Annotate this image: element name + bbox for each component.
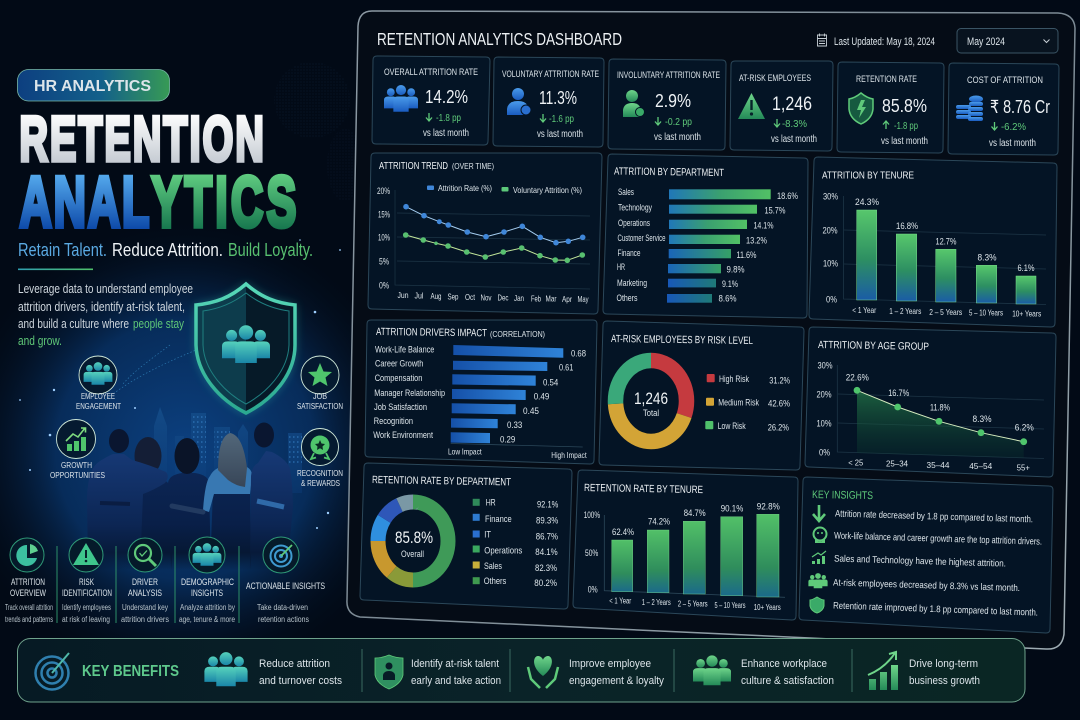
panel: retention rate by tenure: RETENTION RATE BY TENURE — [584, 482, 703, 496]
risk legend: Medium Risk — [718, 398, 759, 408]
feature: demographic insights — [179, 537, 235, 624]
KPI: involuntary attrition rate: -0.2 pp — [665, 117, 692, 128]
retention tenure values: 74.2% — [648, 517, 670, 528]
driver axis captions — [448, 446, 587, 460]
benefit: long-term growth — [868, 652, 980, 690]
trend y axis labels: 10% — [378, 232, 390, 242]
retention legend: 82.3% — [535, 563, 557, 574]
insight: attrition decreased: Attrition rate decreased by 1.8 pp compared to last month. — [835, 509, 1033, 525]
feature: actionable insights — [246, 537, 325, 624]
feature: risk identification: RISK — [79, 577, 94, 587]
retention tenure y labels — [584, 510, 600, 594]
feature: risk identification: IDENTIFICATION — [62, 588, 112, 598]
feature: attrition overview: trends and patterns — [5, 615, 53, 624]
driver names — [373, 344, 445, 440]
tenure values: 8.3% — [978, 252, 997, 264]
panel: retention rate by department: RETENTION RATE BY DEPARTMENT — [372, 474, 512, 488]
trend y axis labels: 5% — [379, 256, 389, 266]
tenure y axis labels: 10% — [823, 258, 838, 270]
tenure category labels: 10+ Years — [1012, 309, 1041, 319]
KPI: at-risk employees: -8.3% — [782, 119, 807, 130]
tenure values: 24.3% — [855, 197, 879, 208]
risk legend: High Risk — [719, 374, 749, 385]
tagline: Reduce Attrition. — [112, 240, 223, 260]
driver values: 0.54 — [543, 378, 558, 388]
panel: key insights — [799, 477, 1053, 633]
feature: demographic insights: age, tenure & more — [179, 615, 235, 624]
age values: 11.8% — [930, 402, 950, 414]
KPI: at-risk employees — [730, 61, 833, 151]
driver values: 0.33 — [507, 420, 522, 431]
tenure values: 16.8% — [896, 221, 918, 232]
retention legend: 89.3% — [536, 516, 559, 526]
benefit: identify at-risk talent: Identify at-risk talent — [411, 658, 499, 670]
retention legend: 92.1% — [537, 500, 559, 510]
icon badge: recognition and rewards: RECOGNITION — [297, 468, 343, 478]
panel: attrition by age group — [805, 327, 1056, 477]
department names: Finance — [618, 248, 640, 258]
retention legend: Others — [484, 576, 506, 587]
tenure values: 6.1% — [1018, 263, 1035, 274]
department values: 9.1% — [722, 279, 738, 290]
KPI: voluntary attrition rate — [493, 57, 604, 147]
KPI: cost of attrition: COST OF ATTRITION — [967, 75, 1043, 86]
age category labels: 55+ — [1017, 462, 1030, 472]
trend month labels: Jun — [398, 290, 409, 300]
people silhouettes — [87, 422, 293, 570]
driver values: 0.45 — [523, 406, 539, 417]
benefit: reduce attrition: Reduce attrition — [259, 658, 330, 670]
feature: actionable insights: retention actions — [258, 615, 309, 624]
KPI: retention rate: RETENTION RATE — [856, 74, 917, 85]
dashboard header: RETENTION ANALYTICS DASHBOARD — [377, 29, 622, 49]
retention legend: Operations — [484, 546, 522, 556]
driver values — [500, 348, 586, 446]
risk legend: 26.2% — [768, 422, 789, 434]
age y axis labels: 10% — [816, 418, 832, 430]
department names: Operations — [618, 218, 650, 228]
benefit: improve engagement — [528, 656, 664, 688]
feature: driver analysis: DRIVER — [132, 577, 158, 587]
risk legend — [705, 374, 790, 434]
icon badge: recognition and rewards: & REWARDS — [301, 478, 340, 488]
age category labels: 45–54 — [969, 461, 992, 471]
insight: attrition decreased — [813, 505, 1033, 525]
tenure category labels: 2 – 5 Years — [929, 307, 962, 317]
tenure bars — [857, 210, 1036, 304]
dashboard frame — [347, 11, 1075, 649]
trend month labels: Nov — [480, 292, 492, 302]
trend month labels: Oct — [465, 292, 475, 302]
KPI: overall attrition rate: OVERALL ATTRITION RATE — [384, 67, 478, 78]
KPI: retention rate: -1.8 pp — [894, 121, 918, 132]
icon: central shield — [196, 284, 295, 413]
icon badge: growth opportunities — [50, 420, 105, 480]
KPI: involuntary attrition rate: vs last month — [654, 132, 701, 143]
icon badge: growth opportunities: GROWTH — [61, 460, 92, 470]
department values: 14.1% — [754, 220, 774, 232]
trend month labels: May — [578, 294, 589, 304]
benefit: enhance culture: culture & satisfaction — [741, 675, 834, 687]
KPI: involuntary attrition rate: 2.9% — [655, 91, 691, 111]
feature: driver analysis: ANALYSIS — [128, 588, 162, 598]
age y axis labels — [816, 360, 833, 458]
retention tenure labels — [609, 596, 781, 612]
KPI: overall attrition rate: 14.2% — [425, 87, 468, 107]
trend month labels: Feb — [531, 293, 541, 303]
left background scene — [0, 62, 363, 640]
panel: at-risk employees by risk level: AT-RISK EMPLOYEES BY RISK LEVEL — [611, 333, 753, 347]
dashboard header — [377, 28, 1058, 53]
icon: target — [36, 653, 69, 690]
KPI: cost of attrition: vs last month — [989, 138, 1036, 149]
icon badge: job satisfaction — [297, 356, 343, 411]
feature: attrition overview: ATTRITION — [11, 577, 45, 587]
driver names: Work-Life Balance — [375, 344, 434, 354]
insight: highest attrition — [812, 551, 1006, 570]
title: YTICS — [152, 162, 296, 242]
panel: key insights: KEY INSIGHTS — [812, 489, 873, 502]
driver values: 0.68 — [571, 348, 586, 360]
age values: 8.3% — [972, 414, 992, 425]
KPI: at-risk employees: vs last month — [771, 134, 817, 145]
trend month labels: Mar — [546, 294, 557, 304]
retention legend: 80.2% — [534, 578, 557, 589]
department names: Technology — [618, 202, 652, 212]
icon badge: recognition and rewards — [297, 428, 343, 488]
panel: at-risk employees by risk level: Total — [643, 408, 659, 418]
benefit: identify at-risk talent: early and take action — [411, 675, 501, 687]
badge: HR Analytics: HR ANALYTICS — [34, 78, 151, 95]
department names: Others — [616, 293, 638, 303]
KPI: retention rate: 85.8% — [882, 96, 927, 116]
age values: 6.2% — [1015, 422, 1034, 434]
retention tenure labels: 2 – 5 Years — [678, 600, 708, 608]
panel: attrition by department — [603, 154, 808, 318]
title — [20, 104, 296, 242]
KPI: cost of attrition: ₹ 8.76 Cr — [990, 97, 1050, 117]
feature: attrition overview: OVERVIEW — [10, 588, 46, 598]
benefit: enhance culture: Enhance workplace — [741, 658, 827, 670]
icon badge: employee engagement: EMPLOYEE — [81, 391, 115, 401]
retention tenure y labels: 50% — [585, 548, 598, 558]
trend month labels — [398, 290, 589, 304]
panel: attrition trend: (OVER TIME) — [452, 162, 494, 171]
trend month labels: Aug — [430, 291, 442, 301]
tenure values: 12.7% — [936, 236, 957, 248]
feature: demographic insights: DEMOGRAPHIC — [181, 577, 234, 587]
department values: 15.7% — [764, 206, 786, 216]
KPI: at-risk employees: AT-RISK EMPLOYEES — [739, 73, 811, 84]
panel: at-risk employees by risk level: 1,246 — [634, 389, 668, 408]
trend month labels: Jul — [414, 290, 424, 300]
benefit: enhance culture — [693, 655, 834, 687]
benefit: long-term growth: business growth — [909, 675, 980, 687]
badge: HR Analytics — [18, 70, 170, 101]
retention tenure bars — [612, 514, 779, 597]
intro paragraph: attrition drivers, identify at-risk talent, — [18, 299, 185, 314]
dashboard header: May 2024 — [967, 36, 1005, 48]
feature: actionable insights: ACTIONABLE INSIGHTS — [246, 581, 325, 591]
driver bars — [451, 345, 563, 443]
panel: attrition drivers impact: ATTRITION DRIVERS IMPACT — [376, 326, 488, 339]
KPI: voluntary attrition rate: -1.6 pp — [549, 114, 574, 125]
panel: retention rate by department: 85.8% — [395, 529, 433, 547]
department values — [718, 191, 798, 304]
age values: 16.7% — [888, 388, 910, 399]
retention tenure values: 90.1% — [721, 504, 744, 515]
department values: 11.6% — [736, 250, 757, 261]
insight: retention improved: Retention rate improved by 1.8 pp compared to last month. — [833, 601, 1038, 619]
benefit: identify at-risk talent — [375, 655, 501, 689]
department names: Sales — [618, 187, 634, 197]
retention tenure values: 92.8% — [757, 502, 780, 513]
retention legend: Finance — [485, 514, 512, 525]
trend legend — [427, 183, 582, 195]
trend y axis labels — [377, 186, 390, 290]
panel: attrition by tenure: ATTRITION BY TENURE — [822, 170, 914, 182]
trend y axis labels: 15% — [378, 210, 390, 220]
risk donut — [616, 360, 686, 442]
KPI: involuntary attrition rate — [608, 59, 726, 150]
icon badge: job satisfaction: SATISFACTION — [297, 401, 343, 411]
benefit: improve engagement: Improve employee — [569, 658, 651, 670]
icon badge: job satisfaction: JOB — [313, 391, 327, 401]
driver axis captions: High Impact — [551, 450, 587, 460]
attrition rate line — [403, 204, 586, 246]
intro paragraph — [18, 281, 193, 348]
department names: Marketing — [617, 278, 647, 288]
department values: 8.6% — [718, 294, 737, 304]
tenure y axis labels: 30% — [823, 192, 838, 202]
insight: at-risk decreased: At-risk employees decreased by 8.3% vs last month. — [833, 578, 1020, 594]
panel: key benefits bar — [18, 638, 1025, 702]
retention tenure y labels: 100% — [584, 510, 600, 520]
risk legend: 31.2% — [769, 376, 790, 386]
feature: risk identification: Identify employees — [62, 603, 111, 612]
panel: at-risk employees by risk level — [599, 321, 804, 470]
tagline: Retain Talent. — [18, 240, 107, 260]
department values: 9.8% — [726, 264, 745, 276]
panel: attrition drivers impact: (CORRELATION) — [490, 329, 545, 339]
KPI: overall attrition rate — [372, 56, 490, 145]
age values — [846, 372, 1034, 434]
tenure y axis labels — [822, 192, 838, 306]
trend y axis labels: 0% — [379, 280, 389, 290]
driver axis captions: Low Impact — [448, 446, 482, 456]
icon badge: employee engagement — [76, 356, 121, 411]
department names: Customer Service — [618, 233, 666, 243]
insight: retention improved — [810, 597, 1038, 619]
feature: demographic insights: Analyze attrition by — [180, 603, 235, 612]
retention tenure values: 62.4% — [612, 527, 634, 538]
age category labels: 35–44 — [926, 460, 950, 470]
driver names: Work Environment — [373, 430, 433, 440]
KPI: voluntary attrition rate: 11.3% — [539, 88, 577, 108]
feature: actionable insights: Take data-driven — [257, 603, 308, 612]
voluntary attrition line — [403, 232, 585, 263]
department values: 13.2% — [746, 236, 767, 246]
insight: at-risk decreased — [808, 573, 1020, 594]
intro paragraph: Leverage data to understand employee — [18, 281, 193, 296]
KPI: at-risk employees: 1,246 — [772, 94, 812, 115]
feature: attrition overview — [5, 538, 53, 624]
driver values: 0.61 — [559, 362, 573, 374]
tagline — [18, 240, 313, 270]
risk legend: Low Risk — [718, 421, 746, 432]
panel: attrition drivers impact — [365, 320, 597, 464]
insight: highest attrition: Sales and Technology have the highest attrition. — [834, 554, 1006, 570]
age category labels — [848, 458, 1030, 472]
KPI: overall attrition rate: -1.8 pp — [436, 113, 461, 124]
benefit: reduce attrition — [204, 652, 342, 687]
tagline: Build Loyalty. — [228, 240, 313, 260]
panel: attrition trend: ATTRITION TREND — [379, 160, 448, 172]
retention tenure values — [612, 502, 780, 538]
retention legend: Sales — [484, 561, 502, 572]
KPI: voluntary attrition rate: VOLUNTARY ATTRITION RATE — [502, 69, 599, 80]
age values: 22.6% — [846, 372, 869, 384]
driver values: 0.29 — [500, 434, 515, 446]
department names — [616, 187, 666, 303]
trend month labels: Sep — [448, 292, 459, 302]
department values: 18.6% — [777, 191, 798, 202]
age y axis labels: 20% — [816, 390, 832, 400]
tenure category labels: 5 – 10 Years — [969, 308, 1003, 318]
retention tenure labels: < 1 Year — [609, 596, 632, 606]
KPI: overall attrition rate: vs last month — [423, 128, 469, 139]
retention tenure values: 84.7% — [684, 508, 706, 519]
KPI: retention rate — [837, 62, 944, 153]
skyline — [154, 407, 302, 493]
retention legend: HR — [486, 498, 496, 508]
retention tenure labels: 10+ Years — [754, 603, 781, 612]
retention legend: 84.1% — [535, 547, 558, 558]
driver values: 0.49 — [534, 392, 549, 402]
driver names: Career Growth — [375, 358, 423, 368]
KPI: retention rate: vs last month — [881, 136, 928, 147]
feature: attrition overview: Track overall attrition — [5, 603, 53, 612]
intro paragraph: people stay — [133, 316, 184, 331]
title: RETENTION — [20, 104, 264, 175]
driver names: Recognition — [374, 416, 413, 426]
tenure y axis labels: 0% — [826, 294, 837, 306]
panel: attrition by tenure — [809, 157, 1057, 327]
KPI: cost of attrition: -6.2% — [1001, 122, 1026, 133]
trend month labels: Jan — [514, 293, 524, 303]
tenure category labels: 1 – 2 Years — [889, 306, 921, 316]
title: ANAL — [20, 162, 149, 242]
panel: retention rate by department: Overall — [401, 549, 424, 559]
department bars — [667, 189, 771, 303]
feature: driver analysis — [121, 538, 169, 624]
feature: demographic insights: INSIGHTS — [191, 588, 223, 598]
retention legend — [473, 498, 559, 589]
age category labels: < 25 — [848, 458, 863, 468]
icon badge: growth opportunities: OPPORTUNITIES — [50, 470, 105, 480]
tenure category labels: < 1 Year — [852, 305, 876, 315]
feature: risk identification: at risk of leaving — [62, 615, 110, 624]
KPI: voluntary attrition rate: vs last month — [537, 129, 583, 140]
panel: attrition by age group: ATTRITION BY AGE GROUP — [818, 339, 929, 353]
feature: driver analysis: Understand key — [122, 603, 168, 612]
tenure values — [855, 197, 1035, 274]
retention legend: 86.7% — [536, 532, 558, 542]
trend month labels: Apr — [562, 294, 572, 304]
panel: key benefits bar: KEY BENEFITS — [82, 663, 179, 680]
intro paragraph: and grow. — [18, 333, 62, 348]
insight: top drivers — [814, 528, 1042, 548]
icon badge: employee engagement: ENGAGEMENT — [76, 401, 121, 411]
dashboard header: Last Updated: May 18, 2024 — [834, 36, 935, 48]
trend month labels: Dec — [498, 293, 509, 303]
panel: retention rate by tenure — [573, 470, 798, 620]
driver names: Manager Relationship — [374, 388, 445, 398]
benefit: reduce attrition: and turnover costs — [259, 675, 342, 687]
KPI: involuntary attrition rate: INVOLUNTARY ATTRITION RATE — [617, 70, 720, 81]
tenure category labels — [852, 305, 1041, 319]
driver names: Job Satisfaction — [374, 402, 427, 412]
retention donut — [378, 502, 448, 580]
retention tenure y labels: 0% — [588, 584, 598, 594]
age y axis labels: 30% — [818, 360, 833, 372]
benefit: long-term growth: Drive long-term — [909, 658, 978, 670]
intro paragraph: and build a culture where — [18, 316, 129, 331]
retention tenure labels: 5 – 10 Years — [714, 601, 746, 610]
trend y axis labels: 20% — [377, 186, 390, 196]
feature: driver analysis: attrition drivers — [121, 615, 169, 624]
driver names: Compensation — [375, 373, 422, 383]
department names: HR — [617, 262, 625, 272]
benefit: improve engagement: engagement & loyalty — [569, 675, 664, 687]
retention tenure labels: 1 – 2 Years — [642, 598, 671, 607]
tenure y axis labels: 20% — [822, 226, 838, 236]
age area line — [854, 387, 1027, 458]
feature: risk identification — [62, 538, 112, 624]
trend legend: Attrition Rate (%) — [438, 183, 492, 193]
age y axis labels: 0% — [819, 448, 830, 458]
panel: retention rate by department — [360, 463, 572, 609]
KPI: cost of attrition — [948, 63, 1059, 155]
panel: attrition by department: ATTRITION BY DEPARTMENT — [614, 166, 725, 179]
age category labels: 25–34 — [886, 458, 908, 468]
risk legend: 42.6% — [768, 398, 790, 410]
panel: attrition trend — [368, 153, 602, 314]
retention legend: IT — [484, 530, 491, 540]
trend legend: Voluntary Attrition (%) — [513, 185, 582, 195]
